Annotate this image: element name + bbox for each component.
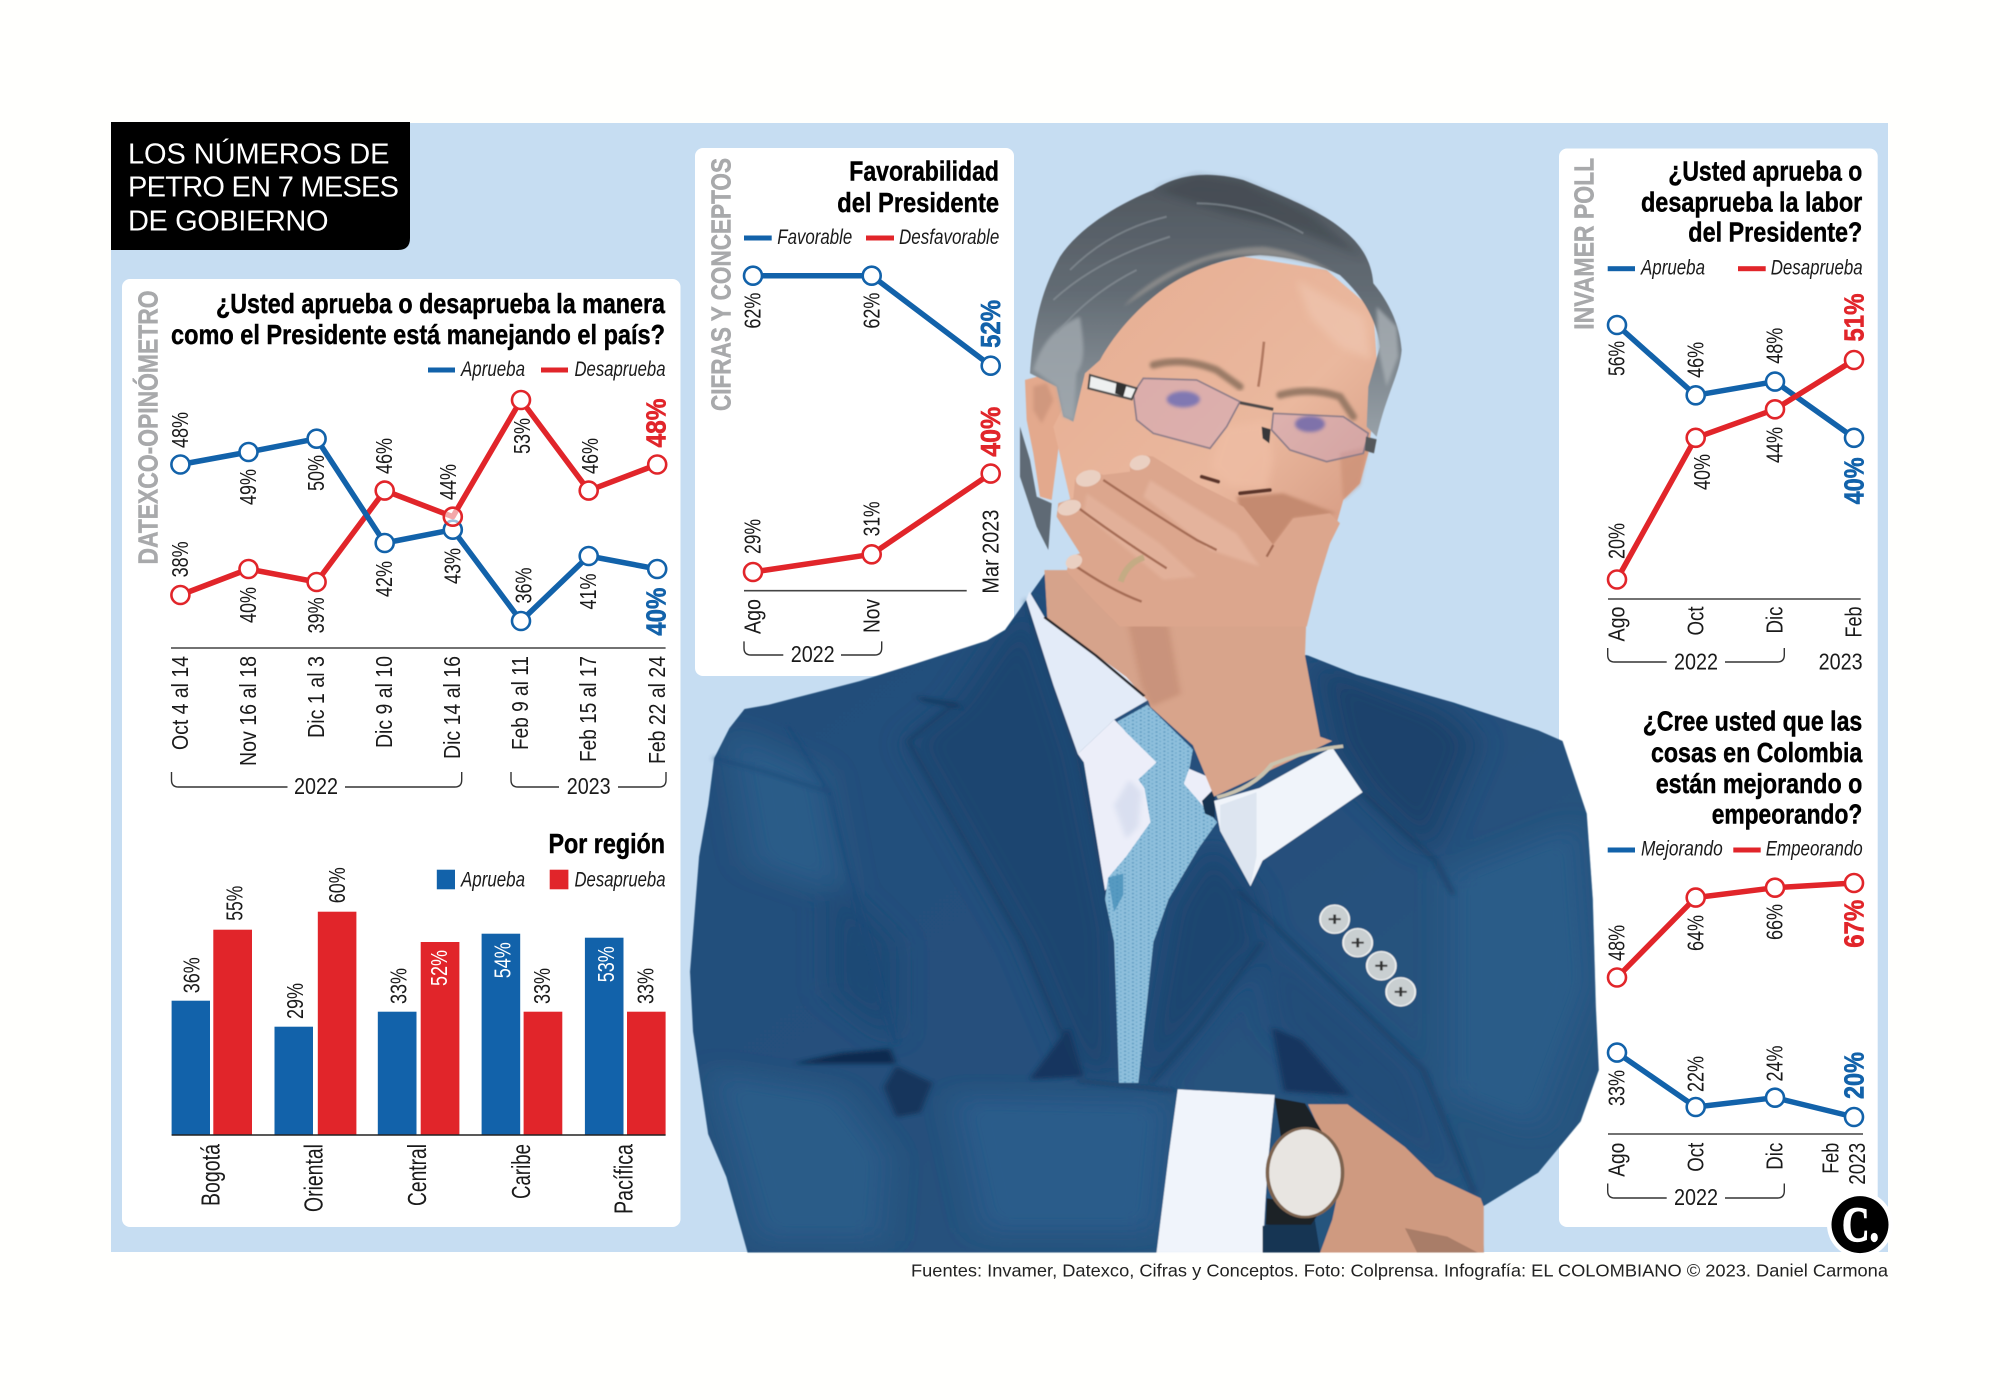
- neck: [1044, 570, 1150, 703]
- line chart: approval over time: Feb 15 al 17: [575, 656, 601, 762]
- bar chart: approval by region: 54%: [490, 942, 516, 978]
- bar chart: approval by region: 29%: [282, 983, 308, 1019]
- line chart: things improving: Ago: [1603, 1143, 1629, 1177]
- line chart: things improving: Dic: [1761, 1143, 1787, 1170]
- bar chart: approval by region: 55%: [221, 886, 247, 921]
- line chart: things improving: Feb: [1817, 1143, 1843, 1174]
- title box: DE GOBIERNO: [128, 205, 328, 237]
- heading: cosas en Colombia: empeorando?: [1712, 798, 1862, 830]
- panel: Cifras y Conceptos: [695, 148, 1014, 676]
- line chart: approval: 40%: [1838, 457, 1869, 504]
- heading: approval question: ¿Usted aprueba o desaprueba la manera: [216, 288, 665, 319]
- eyebrows and frown: [1153, 362, 1240, 387]
- footer credits: Fuentes: Invamer, Datexco, Cifras y Conceptos. Foto: Colprensa. Infografía: EL COLOMBIANO © 2023. Daniel Carmona: [911, 1260, 1888, 1280]
- line chart: things improving: 66%: [1761, 904, 1787, 940]
- title box: PETRO EN 7 MESES: [128, 171, 399, 203]
- line chart: approval: Dic: [1761, 606, 1787, 634]
- legend: aprueba: [1608, 256, 1863, 279]
- title box: [111, 122, 410, 250]
- line chart: approval over time: 49%: [235, 469, 261, 505]
- legend: line chart: Desaprueba: [574, 358, 666, 381]
- heading: favorabilidad: Favorabilidad: [849, 156, 999, 187]
- heading: por región: Por región: [548, 828, 665, 859]
- legend: line chart: Aprueba: [459, 358, 525, 381]
- title box: LOS NÚMEROS DE: [128, 138, 390, 171]
- line chart: approval over time: [167, 391, 672, 799]
- line chart: approval over time: 2023: [567, 773, 611, 799]
- line chart: things improving: [1603, 874, 1870, 1210]
- line chart: things improving: 20%: [1838, 1052, 1869, 1099]
- line chart: approval over time: Feb 22 al 24: [644, 656, 670, 764]
- heading: cosas en Colombia: [1643, 706, 1863, 830]
- source label: Cifras y Conceptos: CIFRAS Y CONCEPTOS: [706, 158, 737, 411]
- line chart: approval over time: Oct 4 al 14: [167, 656, 193, 750]
- bar chart: approval by region: 33%: [386, 968, 412, 1004]
- line chart: approval over time: 38%: [167, 541, 193, 577]
- line chart: approval over time: 40%: [235, 587, 261, 623]
- heading: approval question: [171, 288, 665, 350]
- line chart: approval over time: 2022: [294, 773, 338, 799]
- line chart: things improving: 67%: [1838, 900, 1869, 948]
- line chart: approval: Feb: [1841, 606, 1867, 638]
- bar chart: approval by region: [172, 867, 666, 1214]
- heading: cosas en Colombia: están mejorando o: [1656, 768, 1862, 799]
- legend: favorable: Favorable: [777, 226, 852, 249]
- line chart: favorability: 62%: [858, 293, 884, 329]
- line chart: things improving: 22%: [1682, 1056, 1708, 1092]
- glasses: [1088, 375, 1377, 462]
- line chart: favorability: Ago: [740, 599, 766, 634]
- line chart: favorability: Nov: [858, 599, 884, 633]
- soft folds: [708, 600, 1593, 1241]
- line chart: things improving: 2023: [1844, 1143, 1870, 1185]
- legend: mejorando: Mejorando: [1641, 837, 1723, 860]
- bar chart: approval by region: 36%: [178, 957, 204, 993]
- line chart: approval over time: Dic 9 al 10: [371, 656, 397, 748]
- hair strands: [1053, 203, 1303, 333]
- heading: cosas en Colombia: ¿Cree usted que las: [1643, 706, 1862, 737]
- legend: bar chart: [437, 869, 666, 892]
- right hand wrist: [1108, 570, 1332, 797]
- legend: favorable: [744, 226, 999, 249]
- head: hair, face, glasses, hand: [1020, 175, 1402, 627]
- face: [1053, 257, 1377, 577]
- line chart: approval over time: 39%: [303, 597, 329, 633]
- legend: bar chart: Desaprueba: [574, 869, 666, 892]
- line chart: approval: 48%: [1761, 328, 1787, 364]
- line chart: favorability: 52%: [975, 300, 1006, 348]
- bar chart: approval by region: 53%: [593, 946, 619, 982]
- legend: line chart: [428, 358, 666, 381]
- line chart: favorability: 31%: [858, 501, 884, 536]
- hair: [1030, 175, 1402, 437]
- line chart: approval: 46%: [1682, 342, 1708, 378]
- shirt cuff, right wrist: [1214, 747, 1363, 886]
- line chart: approval over time: 40%: [641, 588, 672, 636]
- heading: labor del presidente: desaprueba la labor: [1641, 186, 1862, 217]
- shirt cuff, left forearm: [1157, 1089, 1275, 1252]
- line chart: approval over time: Feb 9 al 11: [507, 656, 533, 750]
- line chart: approval over time: 44%: [435, 464, 461, 500]
- hand under arm: [1308, 1104, 1484, 1252]
- line chart: approval over time: Dic 1 al 3: [303, 656, 329, 738]
- ear: [1025, 373, 1063, 500]
- line chart: favorability: Mar 2023: [977, 510, 1003, 594]
- line chart: favorability: 40%: [975, 407, 1006, 457]
- line chart: favorability: [740, 267, 1006, 667]
- sleeve buttons: [1320, 905, 1415, 1006]
- panel: Invamer Poll: [1559, 148, 1878, 1227]
- line chart: approval over time: 46%: [371, 438, 397, 474]
- line chart: approval: 2023: [1819, 648, 1863, 674]
- photo: Gustavo Petro, hand over mouth: [690, 175, 1599, 1252]
- line chart: approval: 44%: [1761, 427, 1787, 463]
- legend: bar chart: Aprueba: [459, 869, 525, 892]
- bracelet: [1217, 746, 1343, 797]
- line chart: approval over time: 48%: [641, 398, 672, 448]
- line chart: things improving: 2022: [1674, 1184, 1718, 1210]
- line chart: approval: 40%: [1689, 454, 1715, 490]
- line chart: things improving: 48%: [1603, 925, 1629, 961]
- bar chart: approval by region: Bogotá: [195, 1144, 225, 1206]
- heading: favorabilidad: [837, 156, 999, 218]
- heading: cosas en Colombia: cosas en Colombia: [1651, 737, 1863, 768]
- fingernails: [1056, 452, 1152, 572]
- bar chart: approval by region: Caribe: [506, 1144, 536, 1199]
- dark gap beside tie: [1202, 788, 1215, 818]
- tie: [1105, 705, 1217, 1083]
- line chart: approval over time: 42%: [371, 561, 397, 597]
- line chart: approval: 2022: [1674, 648, 1718, 674]
- line chart: favorability: 2022: [791, 641, 835, 667]
- line chart: things improving: 24%: [1761, 1046, 1787, 1082]
- background panel: [111, 123, 1888, 1252]
- watch: [1266, 1098, 1343, 1225]
- line chart: approval: [1603, 294, 1869, 674]
- body: suit, shirt, tie, arms: [690, 570, 1599, 1252]
- line chart: things improving: Oct: [1682, 1142, 1708, 1172]
- line chart: favorability: 29%: [740, 519, 766, 554]
- line chart: approval: 20%: [1603, 523, 1629, 559]
- line chart: things improving: 64%: [1682, 915, 1708, 951]
- bar chart: approval by region: Pacífica: [609, 1144, 639, 1214]
- line chart: approval: 56%: [1603, 341, 1629, 376]
- line chart: things improving: 33%: [1603, 1070, 1629, 1106]
- heading: labor del presidente: del Presidente?: [1688, 217, 1862, 248]
- logo: El Colombiano: [1827, 1192, 1893, 1258]
- line chart: favorability: 62%: [740, 293, 766, 329]
- line chart: approval: 51%: [1838, 294, 1869, 342]
- line chart: approval over time: 36%: [510, 568, 536, 604]
- bar chart: approval by region: 33%: [632, 968, 658, 1004]
- wedding ring: [1121, 557, 1144, 582]
- heading: approval question: como el Presidente está manejando el país?: [171, 319, 665, 350]
- line chart: approval over time: 41%: [575, 574, 601, 610]
- line chart: approval over time: Nov 16 al 18: [235, 656, 261, 766]
- legend: mejorando: [1608, 837, 1863, 860]
- line chart: approval: Ago: [1603, 606, 1629, 642]
- line chart: approval over time: 48%: [167, 412, 193, 448]
- heading: labor del presidente: ¿Usted aprueba o: [1668, 156, 1862, 187]
- bar chart: approval by region: 33%: [529, 968, 555, 1004]
- heading: labor del presidente: [1641, 156, 1862, 248]
- bar chart: approval by region: 52%: [426, 950, 452, 986]
- legend: aprueba: Aprueba: [1639, 256, 1705, 279]
- legend: favorable: Desfavorable: [899, 226, 999, 249]
- heading: favorabilidad: del Presidente: [837, 187, 999, 218]
- source label: Invamer Poll: INVAMER POLL: [1568, 158, 1599, 330]
- legend: mejorando: Empeorando: [1766, 837, 1863, 860]
- line chart: approval over time: 50%: [303, 455, 329, 491]
- line chart: approval over time: 53%: [509, 418, 535, 454]
- source label: Datexco-Opinómetro: DATEXCO-OPINÓMETRO: [132, 290, 163, 564]
- logo: El Colombiano: C.: [1842, 1196, 1879, 1252]
- line chart: approval: Oct: [1682, 606, 1708, 636]
- bar chart: approval by region: Oriental: [299, 1144, 329, 1212]
- bar chart: approval by region: 60%: [324, 867, 350, 903]
- line chart: approval over time: 46%: [577, 438, 603, 474]
- nose and upper lip: [1237, 493, 1337, 550]
- panel: Datexco-Opinómetro: [122, 279, 680, 1227]
- legend: aprueba: Desaprueba: [1771, 256, 1863, 279]
- bar chart: approval by region: Central: [402, 1144, 432, 1206]
- line chart: approval over time: 43%: [440, 548, 466, 584]
- line chart: approval over time: Dic 14 al 16: [439, 656, 465, 759]
- hand over mouth: [1057, 455, 1340, 627]
- shirt collar and chest: [1026, 591, 1147, 754]
